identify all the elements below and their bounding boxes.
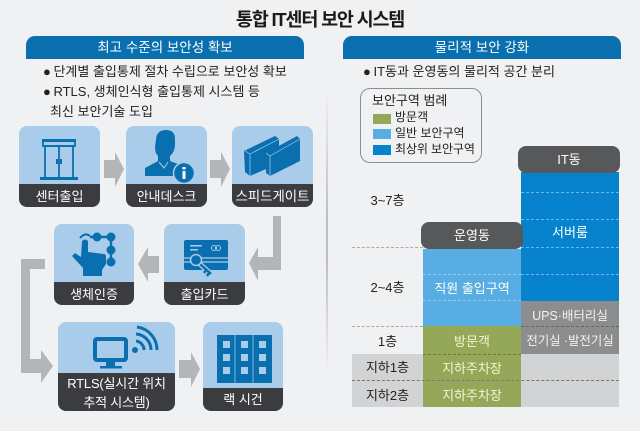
label: 생체인증 xyxy=(70,287,118,302)
label xyxy=(54,282,134,305)
label: 랙 시건 xyxy=(223,392,263,407)
arrow xyxy=(210,152,230,187)
IT column: server room: 서버룸 xyxy=(552,225,588,240)
label xyxy=(58,373,175,411)
arrow xyxy=(104,152,124,187)
icon: monitor with wireless xyxy=(93,326,158,368)
ops building header: 운영동 xyxy=(454,228,490,243)
IT building header xyxy=(518,146,620,173)
tile: 스피드게이트 xyxy=(232,126,313,207)
icon: rack xyxy=(217,335,272,383)
panel header: right: 물리적 보안 강화 xyxy=(435,40,529,55)
label xyxy=(164,282,245,305)
tile: 센터출입 xyxy=(19,126,100,207)
legend: visitor xyxy=(373,110,428,124)
floor label: 3~7층 xyxy=(370,193,404,208)
building chart xyxy=(352,146,620,407)
icon: door xyxy=(40,139,78,180)
bullet text: left: ● RTLS, 생체인식형 출입통제 시스템 등 xyxy=(43,84,260,99)
bullet text: left: ● 단계별 출입통제 절차 수립으로 보안성 확보 xyxy=(43,64,287,79)
label: 센터출입 xyxy=(36,189,83,204)
icon: card and key xyxy=(184,240,228,277)
tile: RTLS xyxy=(58,322,175,411)
IT column: UPS room xyxy=(521,301,619,328)
ops building header xyxy=(421,222,523,249)
IT column: UPS room: UPS·배터리실 xyxy=(532,309,608,323)
ops column: parking B1: 지하주차장 xyxy=(442,361,502,376)
legend: top: 최상위 보안구역 xyxy=(395,142,475,156)
floor label: 2~4층 xyxy=(370,280,404,295)
floor label: 지하2층 xyxy=(366,388,409,403)
label xyxy=(126,184,207,207)
legend: visitor: 방문객 xyxy=(395,110,428,124)
vertical panel divider xyxy=(326,88,328,376)
legend xyxy=(360,88,482,163)
panel header: right xyxy=(343,36,621,59)
floor label: 지하1층 xyxy=(366,360,409,375)
arrow xyxy=(179,352,200,387)
IT column: server room xyxy=(521,172,619,301)
tile: 출입카드 xyxy=(164,224,245,305)
label: 안내데스크 xyxy=(137,189,196,204)
label: RTLS(실시간 위치 xyxy=(67,376,166,391)
IT column: electrical room xyxy=(521,328,619,354)
icon: person with info badge xyxy=(145,130,194,183)
legend title: 보안구역 범례 xyxy=(372,93,447,108)
ops column: staff zone: 직원 출입구역 xyxy=(434,281,510,296)
IT column: basement xyxy=(521,354,619,407)
legend: general: 일반 보안구역 xyxy=(395,126,465,140)
label: 스피드게이트 xyxy=(236,189,309,204)
label xyxy=(232,184,313,207)
basement floor background xyxy=(352,354,423,407)
title: 통합 IT센터 보안 시스템 xyxy=(236,9,404,30)
label: 추적 시스템) xyxy=(83,395,150,410)
tile: 생체인증 xyxy=(54,224,134,305)
arrow: row 1 to row 2 xyxy=(249,216,281,281)
ops column: staff zone xyxy=(423,249,521,326)
IT column: electrical room: 전기실 ·발전기실 xyxy=(526,334,614,348)
tile: 안내데스크 xyxy=(126,126,207,207)
bullet text: left xyxy=(43,64,287,119)
bullet text: right: ● IT동과 운영동의 물리적 공간 분리 xyxy=(363,64,555,79)
ops column: parking B1 xyxy=(423,354,521,381)
panel header: left xyxy=(26,36,304,59)
ops column: visitor xyxy=(423,326,521,354)
arrow: card to bio xyxy=(138,247,159,282)
panel header: left: 최고 수준의 보안성 확보 xyxy=(97,40,233,55)
label xyxy=(19,184,100,207)
bullet text: left: 최신 보안기술 도입 xyxy=(50,104,153,119)
icon: finger touch pattern xyxy=(72,232,116,276)
IT building header: IT동 xyxy=(557,152,581,167)
label: 출입카드 xyxy=(181,287,228,302)
ops column: parking B2: 지하주차장 xyxy=(442,388,502,403)
label xyxy=(203,388,283,411)
floor label: 1층 xyxy=(378,334,397,349)
ops column: visitor: 방문객 xyxy=(454,334,490,349)
icon: speed gates xyxy=(244,136,300,176)
arrow: row 2 to row 3 xyxy=(21,259,53,383)
ops column: parking B2 xyxy=(423,381,521,407)
tile: 랙 시건 xyxy=(203,322,283,411)
